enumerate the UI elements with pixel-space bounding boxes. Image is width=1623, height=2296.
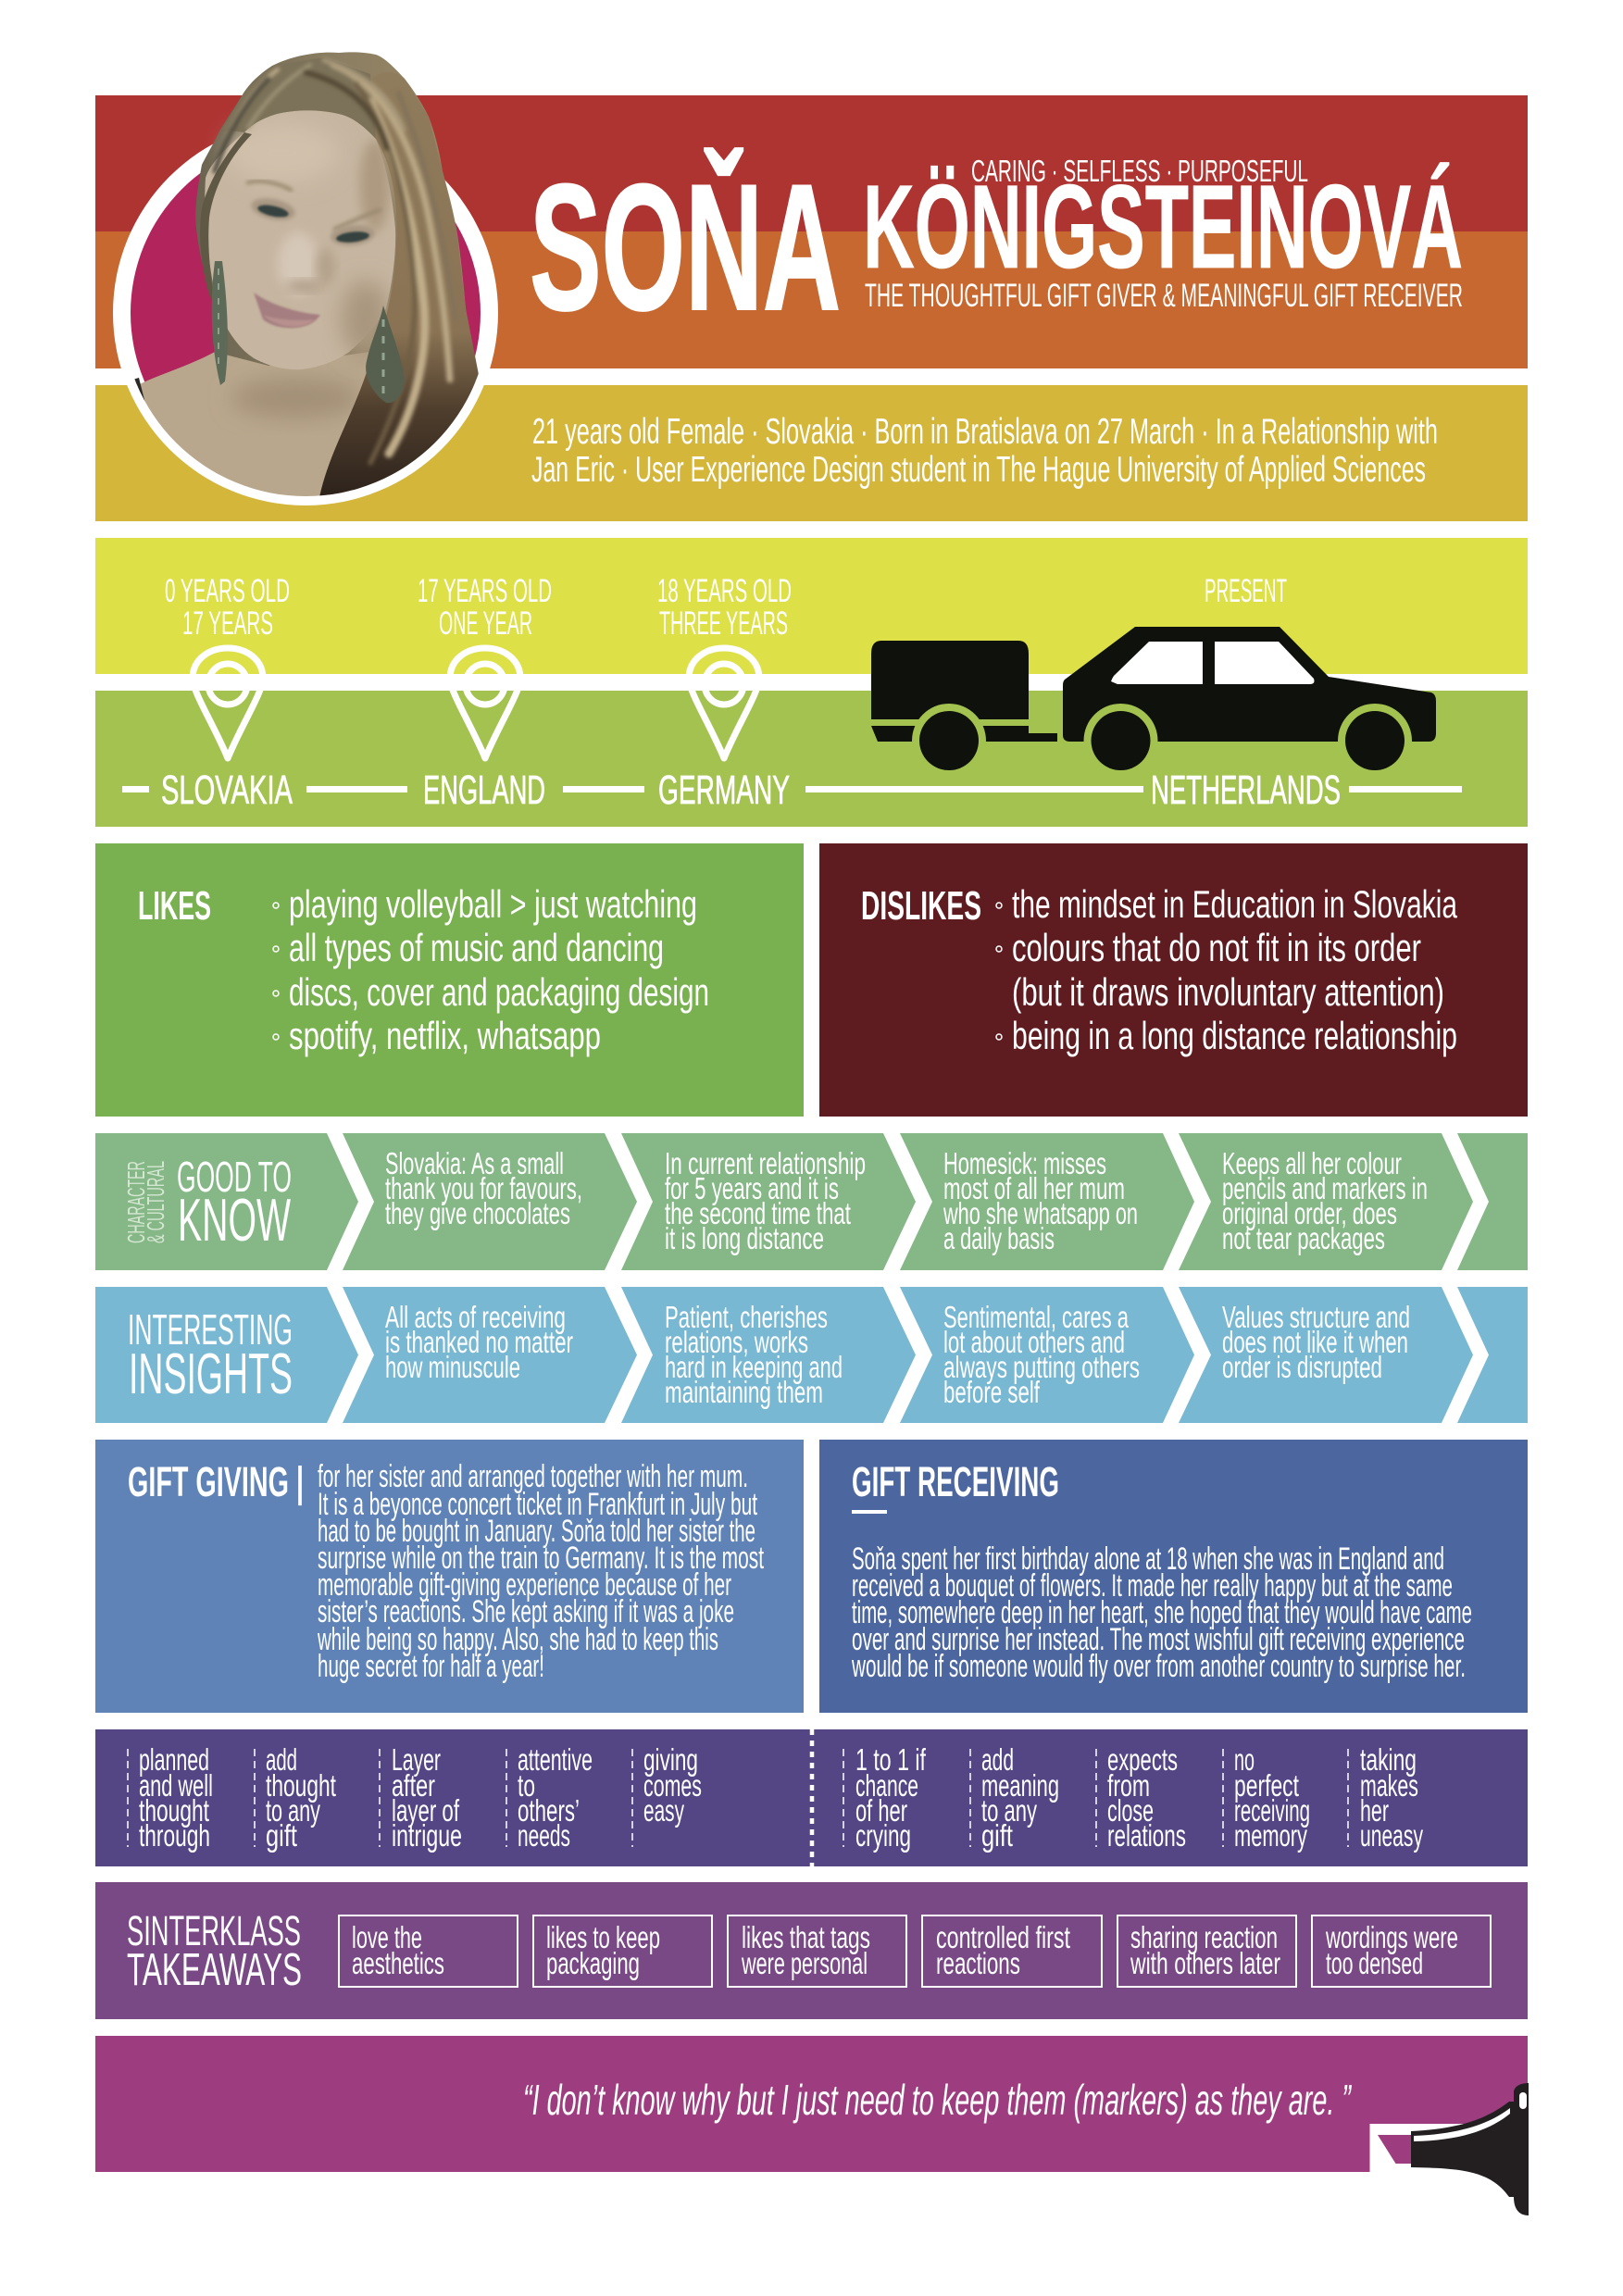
takeaway: tags: were personal <box>741 1946 868 1980</box>
takeaway: tags: likes that tags <box>742 1920 870 1954</box>
receiver trait: memory: perfect <box>1234 1768 1299 1803</box>
profile band: yellow <box>95 385 1528 521</box>
central dotted divider <box>810 1729 814 1866</box>
takeaway: wordings <box>1312 1915 1491 1987</box>
dislikes list <box>996 882 1457 1057</box>
good to know: keeps order: pencils and markers in <box>1222 1171 1428 1205</box>
insight: structure: does not like it when <box>1222 1325 1408 1359</box>
timeline ages: PRESENT <box>1205 573 1287 609</box>
giver trait: layers <box>392 1742 462 1853</box>
receiver trait: meaning: meaning <box>981 1768 1059 1803</box>
receiver trait: crying <box>855 1742 927 1853</box>
receiver trait: uneasy <box>1360 1742 1423 1853</box>
takeaway: sharing <box>1117 1915 1296 1987</box>
header band: orange <box>95 231 1528 368</box>
heading: sinterklass takeaways: SINTERKLASS <box>127 1907 301 1954</box>
giver trait: planned: planned <box>139 1742 209 1777</box>
receiver trait: uneasy: taking <box>1360 1742 1417 1777</box>
likes list: spotify, netflix, whatsapp <box>289 1014 601 1057</box>
gift giving story: huge secret for half a year! <box>318 1649 544 1684</box>
receiver trait: crying: 1 to 1 if <box>855 1742 927 1777</box>
giver trait: easy: easy <box>643 1793 684 1828</box>
receiver trait: expects <box>1107 1742 1186 1853</box>
good to know: homesick <box>943 1146 1138 1255</box>
good to know: Slovakia: thank you for favours, <box>385 1171 582 1205</box>
receiver trait: expects: from <box>1107 1768 1150 1803</box>
header band: red <box>95 95 1528 231</box>
takeaway: aesthetics: aesthetics <box>352 1946 444 1980</box>
panel: quote <box>95 2036 1528 2172</box>
panel: dislikes <box>819 843 1528 1117</box>
insight: patient: hard in keeping and <box>665 1350 843 1384</box>
receiver trait: memory <box>1234 1742 1310 1853</box>
takeaway: tags <box>728 1915 906 1987</box>
dislikes list: colours that do not fit in its order <box>1012 926 1421 969</box>
heading: interesting insights: INSIGHTS <box>129 1342 293 1406</box>
title: Soňa: SOŇA <box>530 147 841 348</box>
receiver trait: uneasy: uneasy <box>1360 1818 1423 1853</box>
likes list: discs, cover and packaging design <box>289 970 709 1014</box>
giver trait: attentive: needs <box>518 1818 570 1853</box>
receiver trait: meaning: add <box>981 1742 1014 1777</box>
gift giving story: It is a beyonce concert ticket in Frankfurt in July but <box>318 1487 757 1522</box>
giver trait: add thought: thought <box>266 1768 336 1803</box>
panel: interesting insights chevrons <box>95 1287 1528 1423</box>
gift giving story: while being so happy. Also, she had to keep this <box>317 1622 718 1657</box>
panel: gift giving <box>95 1440 804 1713</box>
gift receiving story <box>851 1541 1472 1684</box>
takeaway: wordings: wordings were <box>1325 1920 1458 1954</box>
likes list: all types of music and dancing <box>289 926 664 969</box>
receiver trait: expects: close <box>1107 1793 1154 1828</box>
giver trait: attentive: attentive <box>518 1742 593 1777</box>
giver trait: planned: through <box>139 1818 210 1853</box>
country labels: ENGLAND <box>423 767 545 813</box>
heading: good to know: KNOW <box>178 1186 291 1254</box>
portrait photo in circular frame <box>113 52 498 505</box>
icon: highlighter marker <box>1378 2083 1529 2215</box>
dislikes list: the mindset in Education in Slovakia <box>1012 882 1457 926</box>
takeaway: reactions <box>922 1915 1102 1987</box>
timeline ages: ONE YEAR <box>439 605 532 642</box>
heading: gift giving: GIFT GIVING | <box>128 1458 304 1506</box>
timeline ages: 17 YEARS <box>182 605 273 642</box>
insight: sentimental: Sentimental, cares a <box>943 1300 1129 1334</box>
heading: sinterklass takeaways: TAKEAWAYS <box>127 1945 302 1995</box>
gift giving story: for her sister and arranged together with her mum. <box>318 1459 748 1494</box>
takeaway: packaging: likes to keep <box>546 1920 660 1954</box>
heading: sinterklass takeaways <box>127 1907 302 1995</box>
panel: good to know chevrons <box>95 1133 1528 1270</box>
panel: sinterklass takeaways <box>95 1882 1528 2019</box>
giver trait: add thought: add <box>266 1742 297 1777</box>
heading: interesting insights: INTERESTING <box>128 1305 293 1354</box>
good to know: relationship: the second time that <box>665 1196 851 1230</box>
country labels: NETHERLANDS <box>1151 767 1341 813</box>
receiver trait: memory: receiving <box>1234 1793 1310 1828</box>
giver trait: attentive <box>518 1742 593 1853</box>
label: character and cultural: CHARACTER <box>122 1161 150 1243</box>
good to know: keeps order: Keeps all her colour <box>1222 1146 1402 1180</box>
panel: gift traits <box>95 1729 1528 1866</box>
receiver trait: meaning: gift <box>981 1818 1013 1853</box>
good to know: Slovakia <box>385 1146 582 1230</box>
icon: location pins <box>193 648 759 758</box>
giver trait: attentive: others’ <box>518 1793 580 1828</box>
profile description <box>531 412 1438 490</box>
good to know: keeps order: original order, does <box>1222 1196 1397 1230</box>
insight: sentimental: before self <box>943 1375 1041 1409</box>
receiver trait: uneasy: her <box>1360 1793 1389 1828</box>
country labels: SLOVAKIA <box>161 767 293 813</box>
gift giving story <box>317 1459 764 1684</box>
insight: structure: order is disrupted <box>1222 1350 1382 1384</box>
giver trait: planned: and well <box>139 1768 213 1803</box>
insight: structure: Values structure and <box>1222 1300 1410 1334</box>
gift giving story: had to be bought in January. Soňa told her sister the <box>318 1514 755 1549</box>
good to know: homesick: a daily basis <box>943 1221 1055 1255</box>
good to know: Slovakia: Slovakia: As a small <box>385 1146 564 1180</box>
timeline ages: 0 YEARS OLD <box>165 573 290 609</box>
insight: receiving: All acts of receiving <box>385 1300 566 1334</box>
good to know: homesick: who she whatsapp on <box>943 1196 1138 1230</box>
good to know: homesick: Homesick: misses <box>943 1146 1106 1180</box>
insight: receiving: how minuscule <box>385 1350 520 1384</box>
receiver trait: crying: crying <box>855 1818 911 1853</box>
receiver trait: expects: relations <box>1107 1818 1186 1853</box>
takeaway: aesthetics: love the <box>352 1920 422 1954</box>
likes list: playing volleyball > just watching <box>289 882 697 926</box>
giver trait: attentive: to <box>518 1768 535 1803</box>
good to know: relationship <box>665 1146 866 1255</box>
good to know: Slovakia: they give chocolates <box>385 1196 570 1230</box>
country labels: GERMANY <box>658 767 790 813</box>
insight: sentimental: always putting others <box>943 1350 1140 1384</box>
timeline ages: 17 YEARS OLD <box>418 573 552 609</box>
giver trait: add thought: gift <box>266 1818 297 1853</box>
receiver trait: crying: of her <box>855 1793 907 1828</box>
takeaway: packaging <box>533 1915 712 1987</box>
insight: patient: Patient, cherishes <box>665 1300 828 1334</box>
heading: interesting insights <box>128 1305 293 1406</box>
giver trait: planned <box>139 1742 213 1853</box>
good to know: keeps order: not tear packages <box>1222 1221 1385 1255</box>
giver trait: planned: thought <box>139 1793 209 1828</box>
gift giving story: sister’s reactions. She kept asking if it was a joke <box>318 1594 734 1629</box>
insight: patient: maintaining them <box>665 1375 823 1409</box>
heading: good to know <box>177 1153 292 1254</box>
receiver trait: memory: no <box>1234 1742 1255 1777</box>
good to know: keeps order <box>1222 1146 1428 1255</box>
good to know: homesick: most of all her mum <box>943 1171 1125 1205</box>
heading: good to know: GOOD TO <box>177 1153 292 1201</box>
label: character and cultural: & CULTURAL <box>142 1161 169 1243</box>
panel: likes <box>95 843 804 1117</box>
takeaway: sharing: with others later <box>1130 1946 1280 1980</box>
giver trait: easy <box>643 1742 702 1828</box>
insight: sentimental: lot about others and <box>943 1325 1125 1359</box>
timeline ages <box>165 573 1287 642</box>
receiver trait: uneasy: makes <box>1360 1768 1418 1803</box>
giver trait: add thought: to any <box>266 1793 320 1828</box>
insight: patient: relations, works <box>665 1325 808 1359</box>
takeaway: reactions: controlled first <box>936 1920 1070 1954</box>
takeaway: sharing: sharing reaction <box>1130 1920 1278 1954</box>
gift giving story: surprise while on the train to Germany. It is the most <box>318 1541 764 1576</box>
takeaway: wordings: too densed <box>1326 1946 1423 1980</box>
giver trait: layers: Layer <box>392 1742 441 1777</box>
giver trait: layers: layer of <box>392 1793 460 1828</box>
dashed column rules <box>128 1749 1348 1847</box>
giver trait: add thought <box>266 1742 336 1853</box>
insight: receiving <box>385 1300 573 1384</box>
label: character and cultural <box>122 1161 169 1243</box>
takeaway: packaging: packaging <box>546 1946 640 1980</box>
timeline ages: 18 YEARS OLD <box>657 573 792 609</box>
giver trait: layers: after <box>392 1768 435 1803</box>
good to know: relationship: In current relationship <box>665 1146 866 1180</box>
likes list <box>273 882 709 1057</box>
giver trait: layers: intrigue <box>392 1818 462 1853</box>
takeaway: aesthetics <box>339 1915 518 1987</box>
panel: timeline <box>95 538 1528 827</box>
giver trait: easy: comes <box>643 1768 702 1803</box>
insight: receiving: is thanked no matter <box>385 1325 573 1359</box>
heading: gift receiving: GIFT RECEIVING <box>852 1458 1059 1505</box>
takeaway: reactions: reactions <box>936 1946 1020 1980</box>
timeline line <box>122 786 1462 792</box>
receiver trait: meaning: to any <box>981 1793 1037 1828</box>
gift giving story: memorable gift-giving experience because of her <box>318 1567 731 1603</box>
heading: dislikes: DISLIKES <box>861 883 981 929</box>
timeline ages: THREE YEARS <box>659 605 788 642</box>
receiver trait: expects: expects <box>1107 1742 1178 1777</box>
receiver trait: crying: chance <box>855 1768 918 1803</box>
insight: patient <box>665 1300 843 1409</box>
receiver trait: meaning <box>981 1742 1059 1853</box>
good to know: relationship: it is long distance <box>665 1221 824 1255</box>
insight: sentimental <box>943 1300 1140 1409</box>
dislikes list: (but it draws involuntary attention) <box>1012 970 1444 1014</box>
tagline: traits: CARING · SELFLESS · PURPOSEFUL <box>971 154 1308 188</box>
dislikes list: being in a long distance relationship <box>1012 1014 1457 1057</box>
receiver trait: memory: memory <box>1234 1818 1307 1853</box>
heading: likes: LIKES <box>138 883 211 929</box>
good to know: relationship: for 5 years and it is <box>665 1171 839 1205</box>
giver trait: easy: giving <box>643 1742 698 1777</box>
insight: structure <box>1222 1300 1410 1384</box>
panel: gift receiving <box>819 1440 1528 1713</box>
icon: car with trailer <box>871 627 1436 778</box>
country labels <box>161 767 1341 813</box>
